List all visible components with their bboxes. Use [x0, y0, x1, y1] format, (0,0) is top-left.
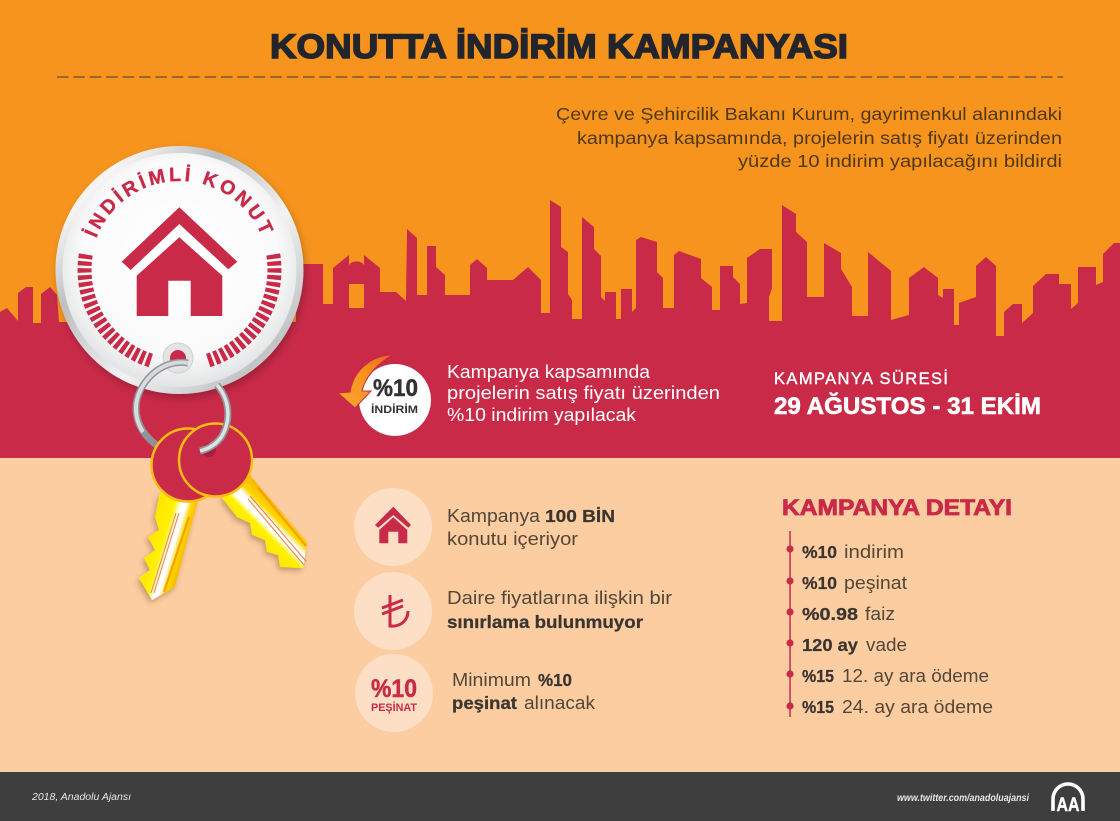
- city skyline: [0, 200, 1120, 458]
- badge: İndirimli Konut: [54, 146, 309, 402]
- icon: AA logo: [1053, 784, 1083, 816]
- detail list: %10: [802, 573, 837, 593]
- timeline: [786, 531, 794, 717]
- key hole: [202, 443, 216, 457]
- footer bar: [0, 772, 1120, 821]
- intro text: kampanya kapsamında, projelerin satış fiyatı üzerinden: [577, 128, 1062, 148]
- icon: lira: [354, 572, 432, 650]
- text: 100 BİN: [545, 506, 615, 526]
- badge house body: [137, 237, 222, 316]
- key ring front: [136, 362, 228, 451]
- text: Minimum: [452, 670, 531, 690]
- discount icon: [338, 355, 431, 436]
- key 1 blade: [139, 493, 198, 600]
- icon: percent: [355, 654, 433, 732]
- text: Daire fiyatlarına ilişkin bir: [447, 588, 672, 608]
- detail list: [802, 542, 993, 717]
- key 2 blade: [222, 473, 307, 568]
- detail list: 24. ay ara ödeme: [842, 697, 993, 717]
- detail list: 120 ay: [802, 635, 858, 655]
- text: konutu içeriyor: [447, 529, 578, 549]
- feature: peşinat: [355, 654, 596, 732]
- badge tick arc left: [85, 254, 152, 361]
- badge tick arc right: [207, 254, 274, 361]
- text: sınırlama bulunmuyor: [447, 612, 643, 632]
- intro text: Çevre ve Şehircilik Bakanı Kurum, gayrimenkul alanındaki: [556, 104, 1062, 124]
- icon: percent: %10: [371, 675, 417, 703]
- icon: percent: PEŞİNAT: [371, 701, 417, 714]
- detail list: peşinat: [844, 573, 907, 593]
- text: [447, 506, 615, 549]
- key ring back: [136, 362, 188, 446]
- white circle: [359, 364, 431, 436]
- discount text: Kampanya kapsamında: [447, 362, 651, 382]
- key 2 head: [179, 424, 252, 496]
- detail list: %0.98: [802, 604, 858, 624]
- heading: KAMPANYA DETAYI: [782, 495, 1012, 520]
- discount arrow: [338, 355, 393, 408]
- discount text: projelerin satış fiyatı üzerinden: [447, 383, 720, 403]
- badge eyelet: [163, 343, 193, 373]
- text: %10: [538, 670, 572, 690]
- badge curved text: İNDİRİMLİ KONUT: [81, 164, 274, 238]
- period label: KAMPANYA SÜRESİ: [774, 369, 948, 388]
- period dates: 29 AĞUSTOS - 31 EKİM: [774, 392, 1041, 420]
- detail list: %15: [802, 666, 834, 686]
- copyright: 2018, Anadolu Ajansı: [31, 792, 131, 803]
- text: Kampanya: [447, 506, 541, 526]
- text: [452, 670, 596, 713]
- badge white disc: [62, 153, 296, 387]
- twitter url: www.twitter.com/anadoluajansi: [897, 792, 1030, 804]
- detail list: indirim: [844, 542, 904, 562]
- orange background: [0, 0, 1120, 460]
- panel: kampanya detayı: [782, 495, 1012, 717]
- feature: 100 bin konut: [354, 488, 615, 566]
- detail list: 12. ay ara ödeme: [842, 666, 989, 686]
- footer: [0, 772, 1120, 821]
- badge house roof: [122, 207, 237, 270]
- key 1 head: [152, 428, 224, 502]
- text: peşinat: [452, 693, 517, 713]
- detail list: faiz: [865, 604, 895, 624]
- text: [447, 588, 672, 632]
- text: alınacak: [524, 693, 596, 713]
- detail list: %10: [802, 542, 837, 562]
- peach lower background: [0, 458, 1120, 772]
- intro text: [556, 104, 1062, 171]
- indirim label: İNDİRİM: [371, 403, 418, 416]
- icon: house: [354, 488, 432, 566]
- detail list: %15: [802, 697, 834, 717]
- campaign period: [774, 369, 1041, 420]
- percent label: %10: [373, 375, 418, 402]
- detail list: vade: [866, 635, 907, 655]
- title: KONUTTA İNDİRİM KAMPANYASI: [270, 28, 848, 66]
- discount text: [447, 362, 720, 425]
- keys: [139, 424, 307, 600]
- badge metal rim: [56, 146, 304, 394]
- discount text: %10 indirim yapılacak: [447, 405, 637, 425]
- intro text: yüzde 10 indirim yapılacağını bildirdi: [738, 151, 1062, 171]
- icon: AA logo: AA: [1056, 795, 1080, 816]
- feature: fiyat sınırı: [354, 572, 672, 650]
